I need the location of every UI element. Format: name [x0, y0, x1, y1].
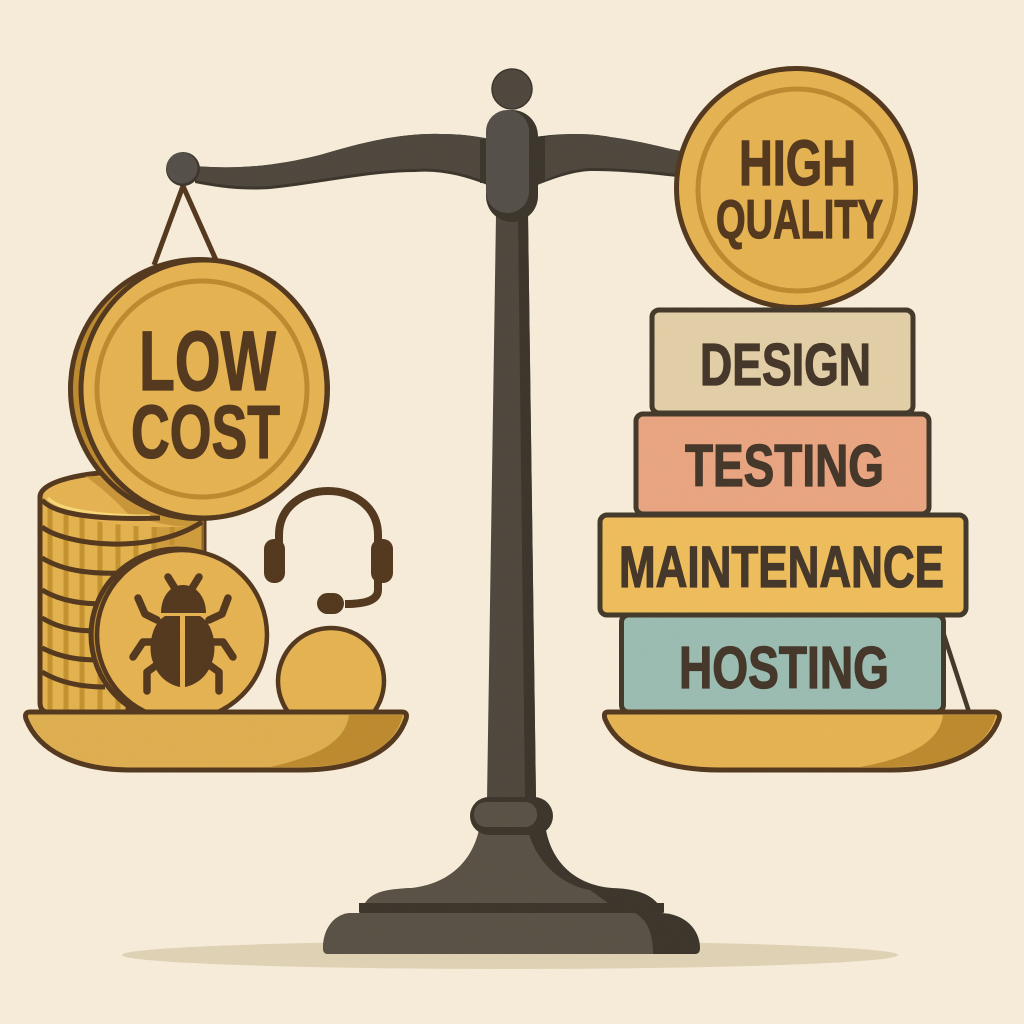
left hanger straps: [154, 186, 216, 265]
block: Design: DESIGN: [700, 332, 871, 398]
block: Testing: [636, 414, 929, 514]
stack band lines: [42, 500, 202, 687]
bug coin: [91, 549, 267, 721]
icon: bug: [133, 577, 233, 691]
base flare: [359, 830, 664, 913]
balance beam: [195, 134, 685, 190]
right pan strap: [943, 632, 969, 712]
plinth: [323, 903, 700, 954]
ground shadow: [122, 941, 898, 969]
icon: headset: [264, 491, 393, 614]
LOW COST coin: [70, 260, 328, 518]
scale stand: [323, 215, 700, 954]
column: [487, 215, 536, 800]
stack ribs: [50, 505, 172, 712]
label: LOW: LOW: [139, 314, 276, 408]
label: QUALITY: QUALITY: [716, 188, 883, 250]
block: Design: [652, 310, 913, 413]
collar: [470, 797, 553, 835]
left pan: [26, 712, 406, 770]
beam left knob: [166, 152, 200, 186]
HIGH QUALITY coin: [676, 68, 916, 308]
plain coin: [276, 626, 386, 710]
top finial: [492, 69, 532, 109]
stack top: [44, 476, 200, 527]
central pivot: [486, 110, 538, 222]
coin stack: [40, 472, 204, 712]
right pan: [604, 712, 999, 770]
block: Hosting: [622, 615, 944, 712]
block: Testing: TESTING: [685, 433, 884, 499]
label: COST: COST: [131, 390, 280, 474]
label: HIGH: HIGH: [739, 127, 856, 199]
block: Maintenance: [600, 515, 966, 615]
block: Hosting: HOSTING: [679, 635, 889, 701]
